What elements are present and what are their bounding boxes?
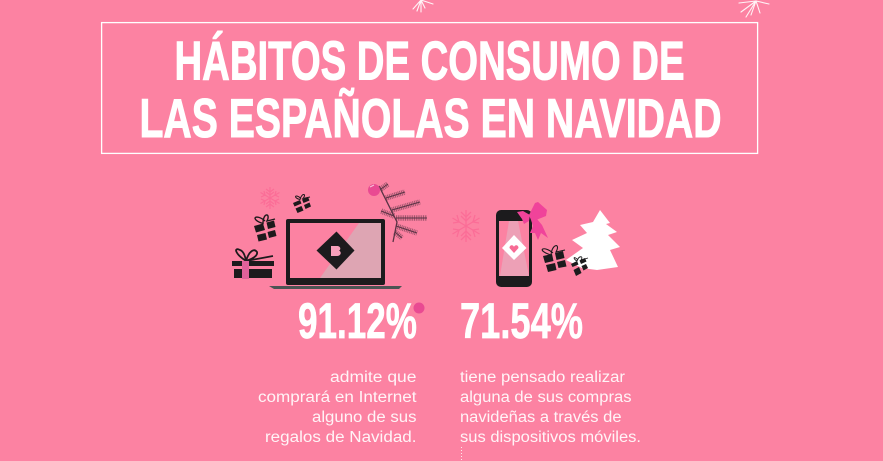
text block: internet	[258, 369, 417, 446]
text block: mobile	[460, 369, 641, 446]
icon: pine branch	[379, 184, 427, 242]
text block: internet: admite que	[330, 369, 416, 386]
icon: small gift	[293, 194, 311, 213]
illustration: phone group	[452, 202, 620, 287]
icon: pink snowflake	[260, 187, 280, 209]
stat: 71.54%: 71.54%	[460, 293, 583, 349]
icon: large gift	[232, 249, 274, 279]
text block: mobile: sus dispositivos móviles.	[460, 429, 641, 446]
icon: laptop	[269, 219, 402, 289]
icon: ornament	[368, 184, 380, 196]
icon: small gift	[571, 257, 588, 276]
text block: internet: comprará en Internet	[258, 389, 417, 406]
title box	[102, 23, 758, 153]
icon: pink bow	[517, 202, 548, 240]
icon: pink snowflake	[452, 210, 480, 242]
text block: mobile: navideñas a través de	[460, 409, 622, 426]
text block: internet: regalos de Navidad.	[265, 429, 416, 446]
icon: medium gift	[542, 246, 566, 272]
text block: mobile: alguna de sus compras	[460, 389, 632, 406]
icon: white tree	[566, 210, 620, 270]
text block: mobile: tiene pensado realizar	[460, 369, 625, 386]
icon: ornament	[414, 302, 424, 314]
icon: medium gift	[254, 215, 276, 242]
stat: 91.12%: 91.12%	[298, 293, 417, 349]
dotted connector	[460, 447, 462, 461]
icon: top snowflake right	[739, 1, 769, 17]
icon: top snowflake left	[413, 0, 433, 12]
icon: smartphone	[496, 210, 532, 287]
text block: internet: alguno de sus	[312, 409, 417, 426]
illustration: laptop group	[232, 184, 427, 289]
